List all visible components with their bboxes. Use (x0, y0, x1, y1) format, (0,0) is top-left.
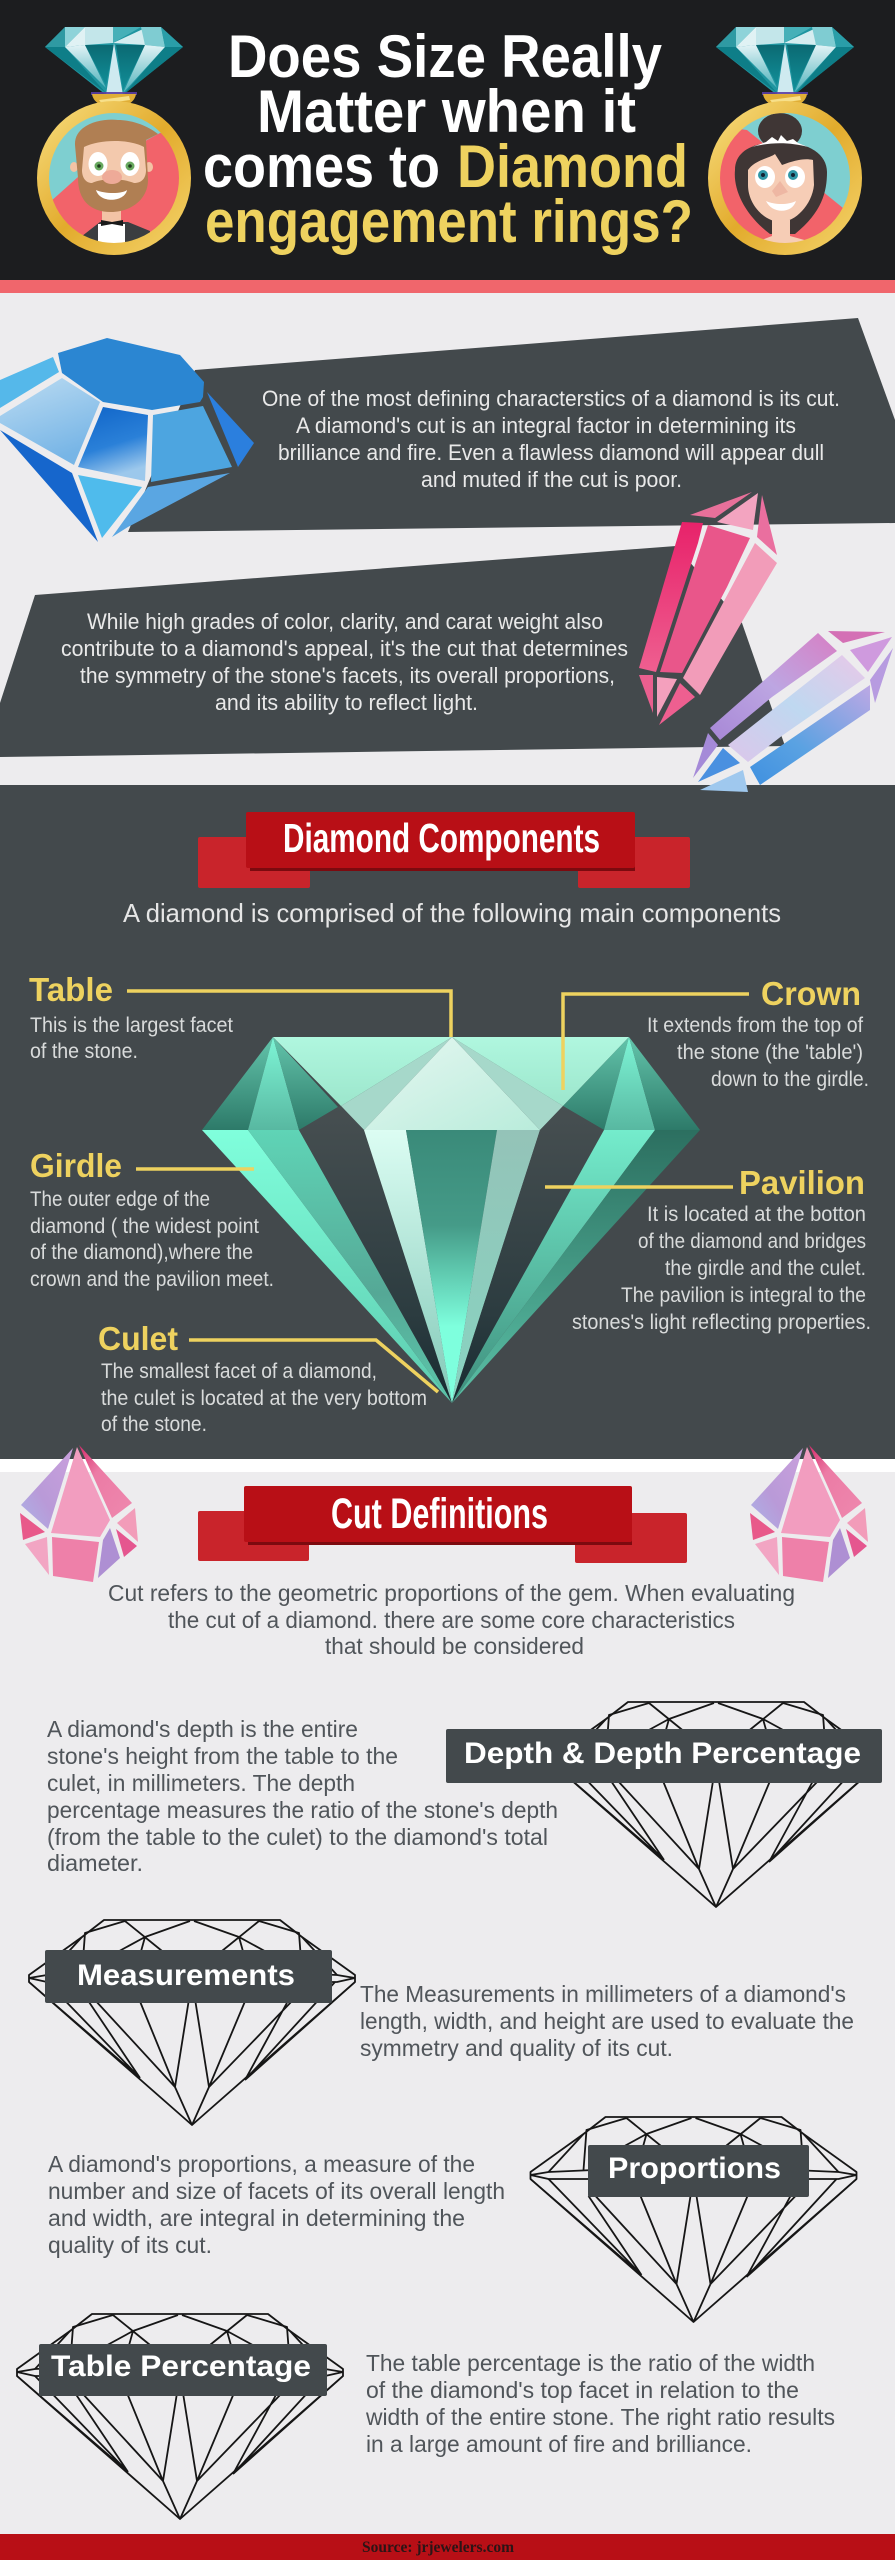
text block: intro paragraph: brilliance and fire. Even a flawless diamond will appear dull (278, 440, 824, 465)
callout: Pavilion: It is located at the botton (647, 1203, 866, 1226)
text block: second paragraph: and its ability to reflect light. (215, 690, 478, 715)
callout: Pavilion: Pavilion (739, 1164, 865, 1201)
text block: measurements definition: length, width, and height are used to evaluate the (360, 2008, 854, 2034)
callout: Crown: Crown (761, 975, 861, 1012)
text block: cut intro: the cut of a diamond. there are some core characteristics (168, 1607, 735, 1633)
icon: pink watercolor crystal (639, 492, 777, 725)
text block: cut intro: that should be considered (325, 1633, 584, 1659)
icon: bride ring (710, 27, 860, 255)
title: comes to (203, 133, 440, 200)
text block: depth definition: percentage measures the ratio of the stone's depth (47, 1797, 558, 1823)
callout: Pavilion (545, 1164, 871, 1334)
text block: second paragraph: the symmetry of the stone's facets, its overall proportions, (80, 663, 615, 688)
callout: Girdle (30, 1147, 274, 1291)
text block: table percentage definition: of the diamond's top facet in relation to the (366, 2377, 799, 2403)
icon: pink gem left (20, 1445, 138, 1582)
title: Diamond (457, 133, 688, 200)
text block: table percentage definition: The table percentage is the ratio of the width (366, 2350, 815, 2376)
callout: Crown: down to the girdle. (711, 1068, 869, 1091)
callout: Table: Table (29, 971, 113, 1008)
callout: Girdle: The outer edge of the (30, 1188, 210, 1211)
callout: Table: This is the largest facet (30, 1014, 233, 1037)
text block: second paragraph (61, 609, 628, 715)
callout: Culet: the culet is located at the very bottom (101, 1387, 427, 1410)
text block: depth definition: (from the table to the culet) to the diamond's total (47, 1824, 548, 1850)
text block: depth definition: culet, in millimeters. The depth (47, 1770, 355, 1796)
text block: proportions definition (48, 2151, 505, 2258)
text block: depth definition: diameter. (47, 1850, 143, 1876)
subheading: A diamond is comprised of the following main components (123, 898, 781, 928)
title: Does Size Really (228, 23, 663, 90)
text block: depth definition (47, 1716, 558, 1876)
heading ribbon: Diamond Components: Diamond Components (283, 815, 600, 861)
panel: symmetry and proportions (0, 546, 785, 757)
text block: measurements definition: The Measurements in millimeters of a diamond's (360, 1981, 846, 2007)
text block: proportions definition: A diamond's proportions, a measure of the (48, 2151, 475, 2177)
icon: pink gem right (750, 1445, 868, 1582)
text block: intro paragraph: A diamond's cut is an integral factor in determining its (296, 413, 796, 438)
text block: second paragraph: contribute to a diamond's appeal, it's the cut that determines (61, 636, 628, 661)
white band (0, 1459, 895, 1472)
footer: source: Source: jrjewelers.com (362, 2539, 515, 2556)
text block: intro paragraph: and muted if the cut is poor. (421, 467, 682, 492)
footer: source (0, 2534, 895, 2560)
callout: Girdle: diamond ( the widest point (30, 1215, 259, 1238)
icon: outline diamond and label, Depth and Depth Percentage (446, 1702, 882, 1907)
text block: depth definition: A diamond's depth is the entire (47, 1716, 358, 1742)
text block: proportions definition: and width, are integral in determining the (48, 2205, 465, 2231)
text block: proportions definition: quality of its cut. (48, 2232, 212, 2258)
icon: outline diamond and label, Table Percentage: Table Percentage (51, 2350, 311, 2383)
callout: Crown: It extends from the top of (647, 1014, 863, 1037)
callout: Crown: the stone (the 'table') (677, 1041, 863, 1064)
title: engagement rings? (205, 188, 693, 255)
callout: Pavilion: The pavilion is integral to the (621, 1284, 866, 1307)
callout: Culet: of the stone. (101, 1413, 207, 1436)
icon: purple blue crystal (693, 631, 893, 792)
icon: outline diamond and label, Depth and Depth Percentage: Depth & Depth Percentage (464, 1737, 861, 1770)
text block: table percentage definition: width of the entire stone. The right ratio results (365, 2404, 835, 2430)
text block: second paragraph: While high grades of color, clarity, and carat weight also (87, 609, 603, 634)
heading ribbon: Cut Definitions: Cut Definitions (331, 1490, 548, 1538)
callout: Girdle: crown and the pavilion meet. (30, 1268, 274, 1291)
text block: cut intro: Cut refers to the geometric proportions of the gem. When evaluating (108, 1580, 795, 1606)
icon: blue watercolor gem (0, 338, 254, 542)
text block: cut intro (108, 1580, 795, 1659)
callout: Culet (98, 1320, 438, 1436)
callout: Pavilion: of the diamond and bridges (638, 1230, 866, 1253)
callout: Table: of the stone. (30, 1040, 138, 1063)
callout: Table (29, 971, 451, 1063)
text block: depth definition: stone's height from the table to the (47, 1743, 398, 1769)
text block: measurements definition (360, 1981, 854, 2061)
callout: Crown (563, 975, 869, 1091)
callout: Girdle: of the diamond),where the (30, 1241, 253, 1264)
icon: outline diamond and label, Measurements (29, 1920, 355, 2125)
callout: Culet: The smallest facet of a diamond, (101, 1360, 377, 1383)
title: Matter when it (257, 78, 636, 145)
icon: outline diamond and label, Measurements: Measurements (77, 1959, 295, 1992)
text block: proportions definition: number and size of facets of its overall length (48, 2178, 505, 2204)
chart: big diamond (202, 1037, 700, 1403)
icon: outline diamond and label, Proportions (530, 2117, 856, 2322)
panel: intro on cut (128, 318, 895, 532)
callout: Pavilion: the girdle and the culet. (665, 1257, 866, 1280)
section: diamond components (0, 785, 895, 1459)
icon: groom ring (40, 27, 190, 255)
callout: Culet: Culet (98, 1320, 178, 1357)
text block: table percentage definition (365, 2350, 835, 2457)
section: cut definitions (17, 1486, 882, 2519)
text block: intro paragraph (262, 386, 840, 492)
title (203, 23, 693, 255)
icon: outline diamond and label, Proportions: Proportions (608, 2152, 781, 2185)
heading ribbon: Diamond Components (198, 812, 690, 888)
icon: outline diamond and label, Table Percentage (17, 2314, 343, 2519)
callout: Pavilion: stones's light reflecting properties. (572, 1311, 871, 1334)
text block: table percentage definition: in a large amount of fire and brilliance. (366, 2431, 752, 2457)
text block: measurements definition: symmetry and quality of its cut. (360, 2035, 673, 2061)
callout: Girdle: Girdle (30, 1147, 122, 1184)
header (0, 0, 895, 293)
text block: intro paragraph: One of the most defining characterstics of a diamond is its cut. (262, 386, 840, 411)
heading ribbon: Cut Definitions (198, 1486, 687, 1563)
